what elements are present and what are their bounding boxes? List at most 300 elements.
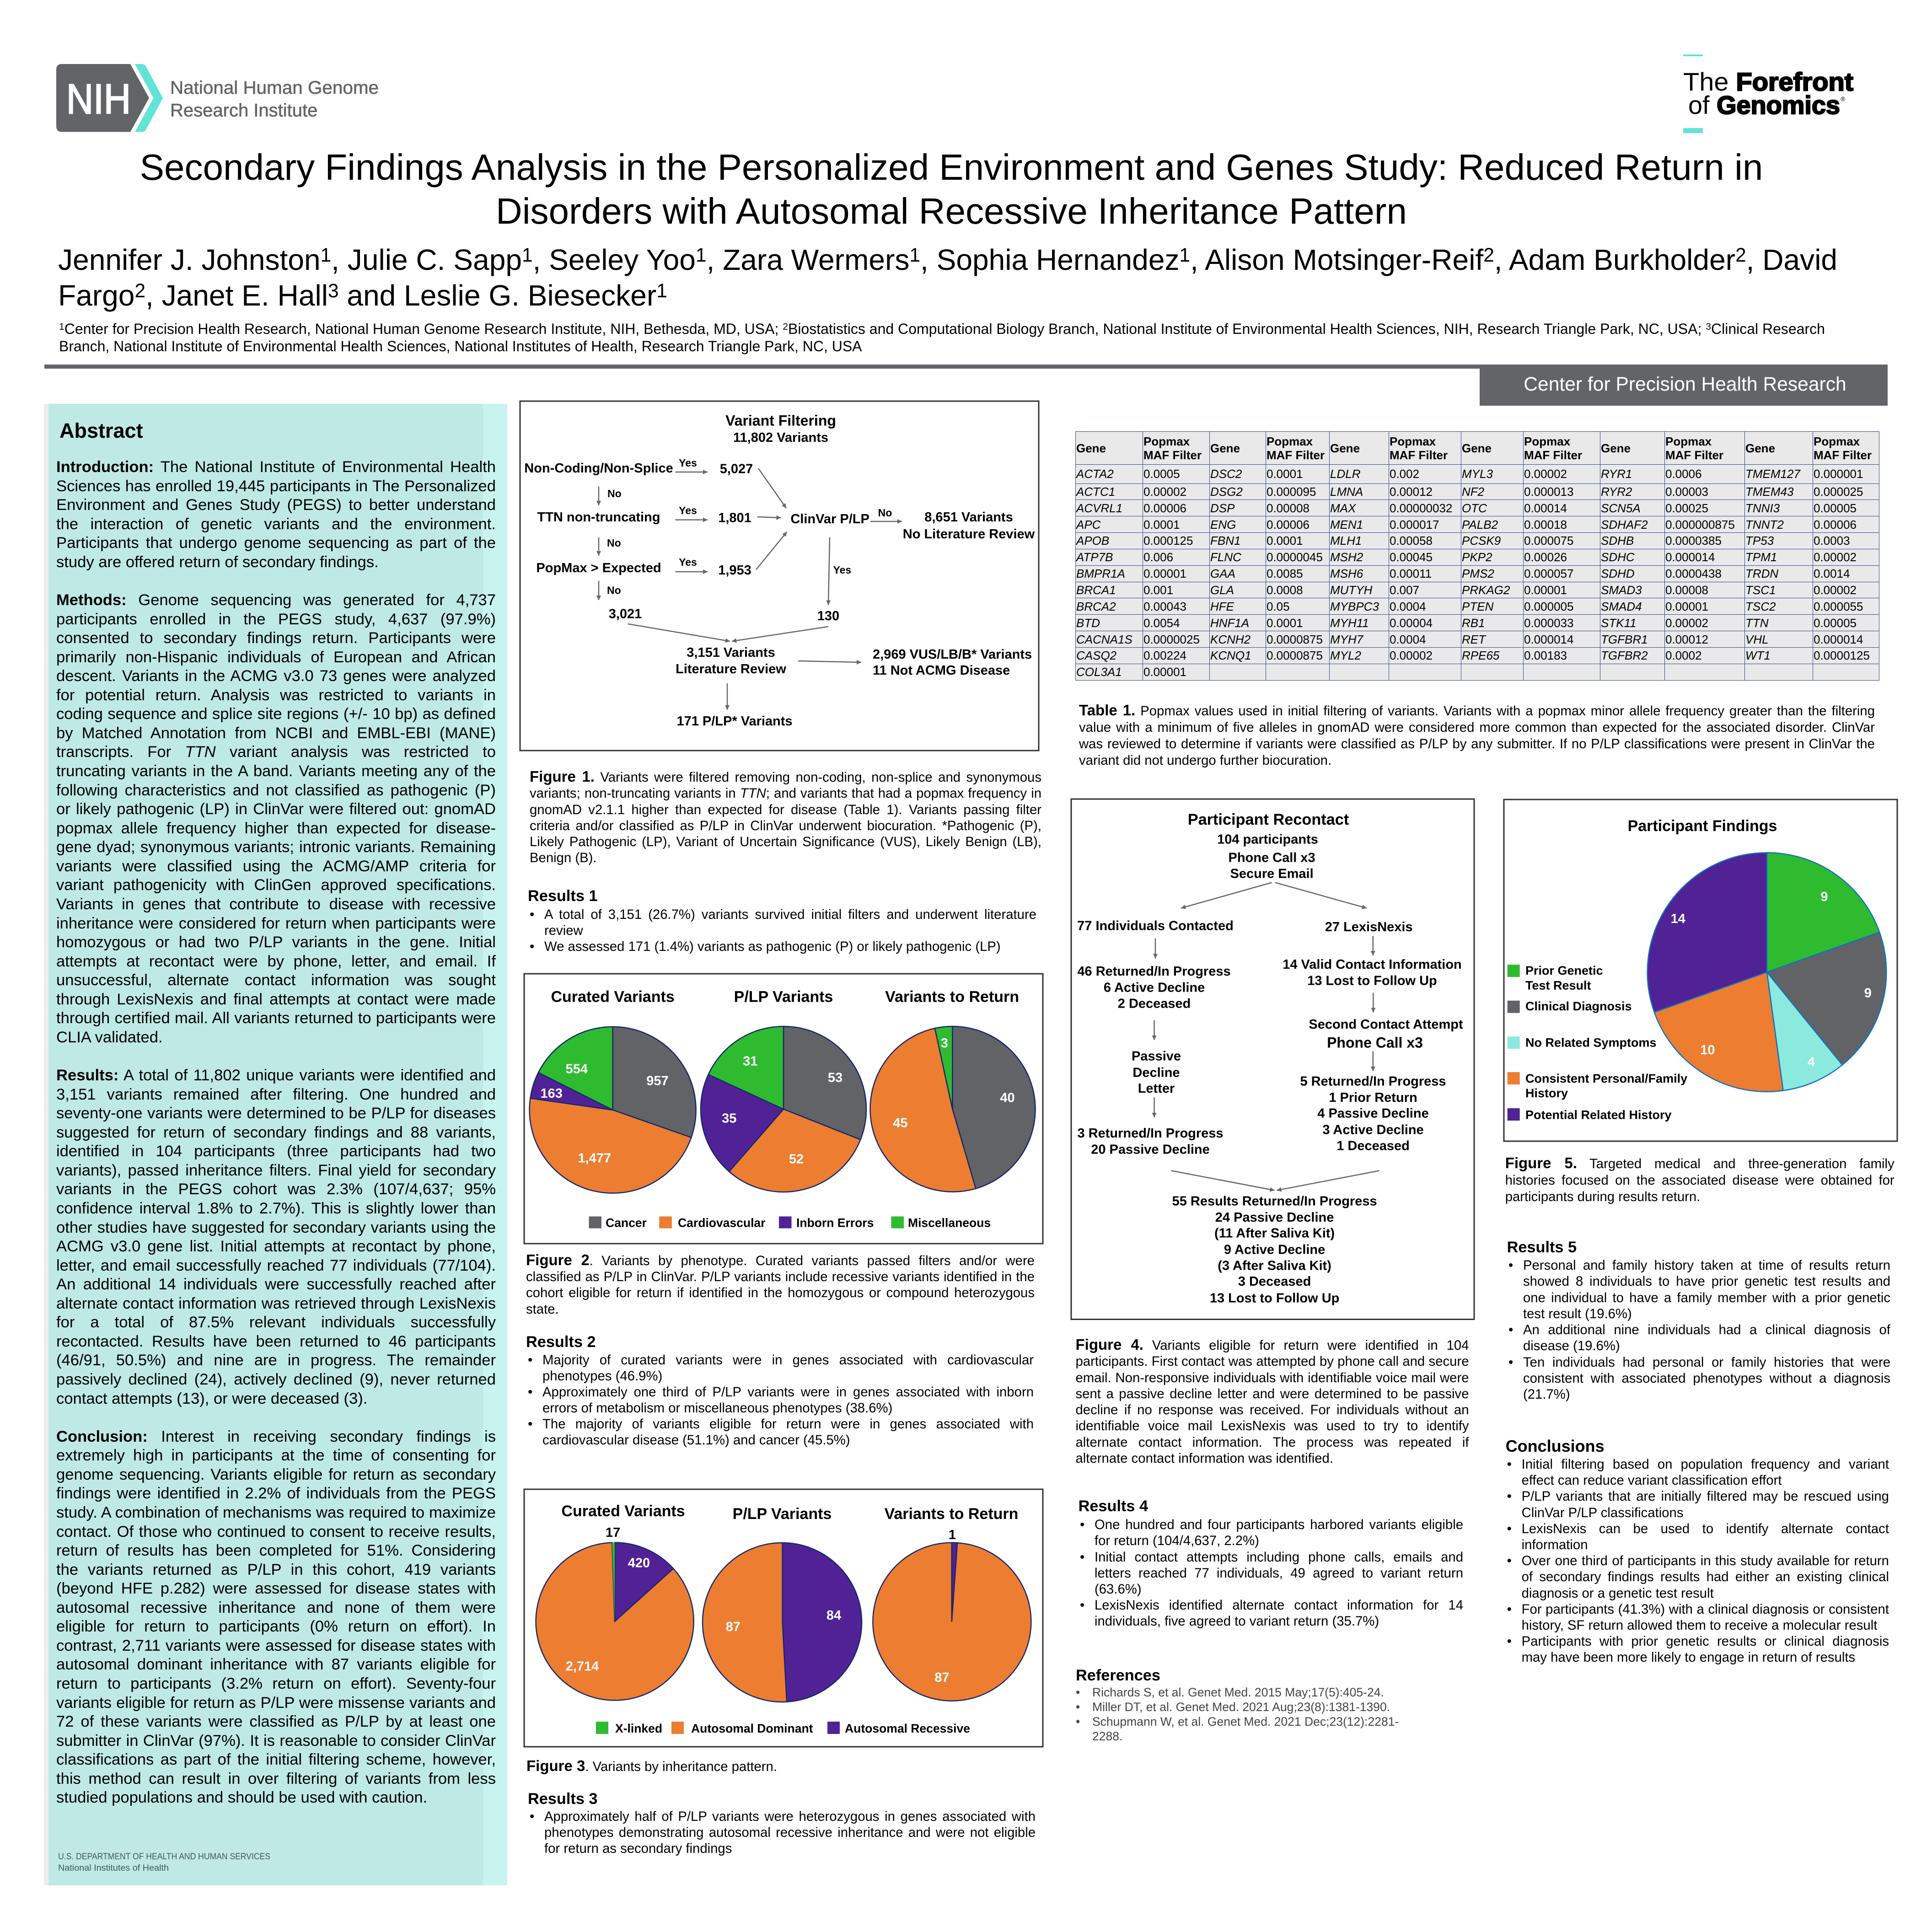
pie chart: P/LP variants by inheritance: 84 <box>826 1608 841 1623</box>
table 1: popmax MAF filter values: 0.00006 <box>1143 501 1186 515</box>
pie chart: curated variants: 957 <box>646 1073 669 1088</box>
table 1: popmax MAF filter values: LMNA <box>1330 485 1363 499</box>
results 5 bullets: (21.7%) <box>1523 1387 1570 1402</box>
table 1: popmax MAF filter values: 0.00001 <box>1665 600 1708 613</box>
abstract body text: Sciences has enrolled 19,445 participants in The Personalized <box>56 478 496 495</box>
table 1: popmax MAF filter values: 0.00001 <box>1524 583 1567 597</box>
table 1: popmax MAF filter values: 0.0000385 <box>1665 534 1722 547</box>
row: non-coding filter <box>524 457 786 508</box>
table 1: popmax MAF filter values: Gene <box>1330 441 1360 455</box>
legend: inheritance <box>596 1722 970 1735</box>
table 1: popmax MAF filter values: DSP <box>1210 501 1234 515</box>
table 1: popmax MAF filter values: MAF Filter <box>1814 448 1872 462</box>
header band: Center for Precision Health Research <box>44 365 1888 406</box>
table 1: popmax MAF filter values: Popmax <box>1665 435 1712 448</box>
table 1: popmax MAF filter values: 0.000125 <box>1143 534 1193 547</box>
affiliations: Branch, National Institute of Environmental Health Sciences, National Institutes of Health, Research Triangle Park, NC, USA <box>59 338 862 354</box>
abstract body text: truncating variants in the A band. Variants meeting any of the <box>56 762 496 780</box>
table 1: popmax MAF filter values: 0.00005 <box>1814 616 1857 630</box>
abstract body text: variants in the PEGS cohort was 2.3% (107/4,637; 95% <box>56 1181 496 1198</box>
abstract body text: following characteristics and not classified as pathogenic (P) <box>56 782 496 799</box>
figure 1 caption: gnomAD v2.1.1 higher than expected for disease (Table 1). Variants passing filter <box>530 802 1041 817</box>
footer: U.S. Department of Health and Human Services: U.S. DEPARTMENT OF HEALTH AND HUMAN SERVICES <box>58 1852 270 1862</box>
results 5 bullets: An additional nine individuals had a clinical diagnosis of <box>1523 1322 1890 1337</box>
outcome summary: 9 Active Decline <box>1224 1242 1325 1257</box>
left branch: individuals contacted: Letter <box>1138 1081 1175 1096</box>
conclusions bullets: For participants (41.3%) with a clinical diagnosis or consistent <box>1522 1602 1889 1617</box>
table 1 caption: variant did not undergo further biocuration. <box>1079 753 1331 768</box>
legend: participant findings: Test Result <box>1525 978 1591 992</box>
abstract body text: CLIA validated. <box>56 1029 163 1046</box>
abstract body text: through LexisNexis and final attempts at contact were made <box>56 991 496 1008</box>
right branch: LexisNexis: Phone Call x3 <box>1327 1034 1423 1051</box>
results 2 bullets: The majority of variants eligible for return were in genes associated with <box>542 1417 1034 1432</box>
heading: Participant Recontact: 104 participants <box>1217 832 1318 847</box>
figure 4 caption: Figure 4. Variants eligible for return were identified in 104 <box>1076 1336 1469 1353</box>
table 1: popmax MAF filter values: MYH11 <box>1330 616 1369 630</box>
row: popmax filter: 1,953 <box>718 563 751 578</box>
pie chart: participant findings: 4 <box>1808 1055 1815 1069</box>
abstract body text: Variants in genes that contribute to disease with recessive <box>56 896 496 913</box>
table 1: popmax MAF filter values: 0.000001 <box>1814 467 1863 481</box>
table 1: popmax MAF filter values: CASQ2 <box>1076 649 1116 662</box>
row: non-coding filter: 5,027 <box>720 462 753 477</box>
table 1: popmax MAF filter values: MYL3 <box>1462 467 1493 481</box>
row: popmax filter: Yes <box>679 556 697 568</box>
legend: phenotype: Cardiovascular <box>678 1216 765 1229</box>
table 1: popmax MAF filter values: KCNQ1 <box>1210 649 1251 662</box>
conclusions bullets: of secondary findings results had either an existing clinical <box>1522 1569 1889 1584</box>
table 1: popmax MAF filter values: 0.0001 <box>1267 616 1303 630</box>
heading: Variant Filtering: Variant Filtering <box>725 413 836 429</box>
title: Disorders with Autosomal Recessive Inheritance Pattern <box>496 191 1407 231</box>
table 1: popmax MAF filter values: 0.00043 <box>1143 600 1186 613</box>
table 1: popmax MAF filter values: 0.0054 <box>1143 616 1180 630</box>
pie chart: variants to return by inheritance <box>873 1528 1031 1701</box>
table 1: popmax MAF filter values: 0.000014 <box>1665 550 1715 564</box>
abstract body text: by Matched Annotation from NCBI and EMBL-EBI (MANE) <box>56 724 496 742</box>
chart titles: P/LP Variants <box>734 988 833 1005</box>
chart titles: Variants to Return <box>885 1505 1018 1523</box>
figure 1 caption <box>530 769 1041 866</box>
left branch: individuals contacted: 46 Returned/In Progress <box>1077 964 1231 979</box>
figure 2 caption: cohort eligible for return if identified in the homozygous or compound heterozygous <box>526 1285 1035 1300</box>
table 1: popmax MAF filter values: PRKAG2 <box>1462 583 1510 597</box>
node: 3,151 variants literature review: 3,151 Variants <box>687 645 775 660</box>
table 1 caption: was reviewed to determine if variants were classified as P/LP by any submitter. If no P/LP classifications were present in ClinVar the <box>1079 736 1875 751</box>
table 1: popmax MAF filter values: 0.000075 <box>1524 534 1573 547</box>
abstract body text: ACMG v3.0 gene list. Initial attempts at recontact by phone, <box>56 1238 496 1255</box>
table 1: popmax MAF filter values: 0.0008 <box>1267 583 1303 597</box>
table 1: popmax MAF filter values: DSG2 <box>1210 485 1243 499</box>
conclusions bullets: P/LP variants that are initially filtered may be rescued using <box>1522 1489 1889 1504</box>
figure 5 caption: participants during results return. <box>1505 1189 1700 1204</box>
pie chart: curated variants: 554 <box>566 1062 588 1076</box>
table 1: popmax MAF filter values: Popmax <box>1143 435 1190 448</box>
legend: inheritance: Autosomal Recessive <box>845 1722 970 1735</box>
results 5 bullets: Personal and family history taken at time of results return <box>1523 1258 1890 1273</box>
table 1: popmax MAF filter values: HNF1A <box>1210 616 1249 630</box>
results 2 bullets: cardiovascular disease (51.1%) and cancer (45.5%) <box>542 1433 850 1448</box>
left branch: individuals contacted: 20 Passive Decline <box>1091 1142 1210 1157</box>
abstract body text: seventy-one variants were determined to be P/LP for diseases <box>56 1105 496 1122</box>
abstract body text: autosomal recessive inheritance and none of them were <box>56 1599 496 1616</box>
results 3 bullets: Approximately half of P/LP variants were heterozygous in genes associated with <box>544 1809 1036 1824</box>
table 1: popmax MAF filter values: 0.00002 <box>1390 649 1433 662</box>
table 1: popmax MAF filter values: 0.0000125 <box>1814 649 1870 662</box>
title: Secondary Findings Analysis in the Personalized Environment and Genes Study: Reduced Return in <box>140 147 1763 188</box>
results 1 bullets <box>530 907 1036 955</box>
table 1: popmax MAF filter values: ACTC1 <box>1076 485 1115 499</box>
abstract body text: descent. Variants in the ACMG v3.0 73 genes were analyzed <box>56 667 496 685</box>
outcome summary: 55 Results Returned/In Progress <box>1172 1194 1377 1208</box>
table 1: popmax MAF filter values: 0.00183 <box>1524 649 1567 662</box>
outcome summary: 3 Deceased <box>1238 1274 1311 1289</box>
left branch: individuals contacted: Passive <box>1132 1049 1181 1063</box>
table 1: popmax MAF filter values: Popmax <box>1390 435 1436 448</box>
table 1: popmax MAF filter values: 0.00008 <box>1267 501 1309 515</box>
legend: phenotype <box>589 1216 991 1229</box>
table 1: popmax MAF filter values: APC <box>1076 518 1100 531</box>
pie chart: P/LP variants <box>701 1026 866 1192</box>
node: ClinVar P/LP: No <box>878 507 892 519</box>
table 1: popmax MAF filter values: GLA <box>1210 583 1234 597</box>
panel: figure 1 variant filtering flowchart <box>520 401 1039 751</box>
abstract body text: classifications as part of the initial filtering scheme, however, <box>56 1751 496 1768</box>
abstract body text: this method can result in over filtering of variants from less <box>56 1770 496 1787</box>
pie chart: variants to return by inheritance: 1 <box>949 1528 956 1542</box>
heading: Participant Recontact: Participant Recontact <box>1188 811 1349 828</box>
figure 3 caption: Figure 3. Variants by inheritance pattern. <box>526 1757 777 1774</box>
chart titles: Curated Variants <box>561 1503 685 1520</box>
table 1: popmax MAF filter values: RB1 <box>1462 616 1485 630</box>
pie chart: variants to return by inheritance: 87 <box>934 1670 950 1685</box>
node: 171 P/LP variants: 171 P/LP* Variants <box>676 714 793 729</box>
results 5 bullets <box>1508 1257 1890 1403</box>
table 1: popmax MAF filter values: TRDN <box>1745 567 1778 580</box>
results 1 bullets: review <box>544 923 583 938</box>
chart titles <box>561 1503 1018 1523</box>
results 4 bullets: letters reached 77 individuals, 49 agreed to variant return <box>1095 1566 1463 1581</box>
row: TTN filter: TTN non-truncating <box>537 510 660 525</box>
table 1: popmax MAF filter values: 0.0000438 <box>1665 567 1722 580</box>
table 1: popmax MAF filter values: MAF Filter <box>1665 448 1723 462</box>
authors <box>58 242 1865 313</box>
table 1: popmax MAF filter values: APOB <box>1076 534 1109 547</box>
abstract body text: recontacted. Results have been returned to 46 participants <box>56 1333 496 1350</box>
panel: figure 5 participant findings <box>1504 800 1897 1141</box>
results 4 bullets: LexisNexis identified alternate contact information for 14 <box>1095 1598 1463 1613</box>
heading: Conclusions: Conclusions <box>1506 1437 1605 1455</box>
table 1: popmax MAF filter values: 0.00000032 <box>1390 501 1452 515</box>
figure 2 caption <box>526 1253 1035 1317</box>
arrow: no to popmax: No <box>607 537 621 549</box>
heading: Results 4: Results 4 <box>1079 1497 1148 1515</box>
table 1: popmax MAF filter values: 0.0005 <box>1143 467 1180 481</box>
left branch: individuals contacted: 77 Individuals Contacted <box>1077 918 1234 933</box>
right branch: LexisNexis: Second Contact Attempt <box>1309 1017 1463 1032</box>
right branch: LexisNexis: 3 Active Decline <box>1322 1122 1424 1137</box>
figure 4 caption: alternate contact information. The process was repeated if <box>1076 1435 1469 1450</box>
legend: participant findings: Clinical Diagnosis <box>1525 999 1632 1013</box>
pie chart: variants to return: 45 <box>893 1116 908 1130</box>
table 1: popmax MAF filter values: COL3A1 <box>1076 665 1122 679</box>
legend: participant findings: History <box>1525 1086 1568 1100</box>
results 5 bullets: disease (19.6%) <box>1523 1338 1620 1353</box>
abstract body text: letter, and email successfully reached 77 individuals (77/104). <box>56 1257 496 1274</box>
abstract body text: (46/91, 50.5%) and nine are in progress. The remainder <box>56 1352 496 1369</box>
table 1: popmax MAF filter values: Popmax <box>1524 435 1570 448</box>
logo: The Forefront of Genomics: of Genomics <box>1688 91 1840 119</box>
table 1: popmax MAF filter values: PCSK9 <box>1462 534 1501 547</box>
row: TTN filter <box>537 504 781 525</box>
table 1: popmax MAF filter values <box>1075 431 1879 681</box>
outcome summary: 24 Passive Decline <box>1215 1210 1334 1225</box>
arrow: no to 3,021: 3,021 <box>609 607 642 622</box>
table 1: popmax MAF filter values: Gene <box>1601 441 1631 455</box>
chart titles: P/LP Variants <box>733 1505 832 1523</box>
results 4 bullets <box>1080 1517 1463 1629</box>
table 1: popmax MAF filter values: MUTYH <box>1330 583 1372 597</box>
table 1: popmax MAF filter values: 0.00058 <box>1390 534 1433 547</box>
figure 4 caption: participants. First contact was attempted by phone call and secure <box>1076 1354 1469 1369</box>
abstract body text: variants were classified using the ACMG/AMP criteria for <box>56 858 496 875</box>
table 1: popmax MAF filter values: 0.00026 <box>1524 550 1567 564</box>
figure 4 caption: decline if no response was received. For individuals without an <box>1076 1402 1469 1417</box>
table 1: popmax MAF filter values: Gene <box>1076 441 1106 455</box>
table 1: popmax MAF filter values: 0.0000875 <box>1267 633 1323 646</box>
legend: participant findings <box>1508 964 1687 1122</box>
row: non-coding filter: Yes <box>679 457 697 469</box>
table 1: popmax MAF filter values: MSH6 <box>1330 567 1363 580</box>
right branch: LexisNexis: 4 Passive Decline <box>1317 1106 1429 1121</box>
table 1: popmax MAF filter values: FLNC <box>1210 550 1241 564</box>
panel: figure 3 variants by inheritance <box>524 1489 1043 1747</box>
results 4 bullets: Initial contact attempts including phone calls, emails and <box>1095 1550 1463 1565</box>
abstract body text: Results: A total of 11,802 unique variants were identified and <box>56 1067 496 1084</box>
table 1: popmax MAF filter values: MYH7 <box>1330 633 1363 646</box>
table 1: popmax MAF filter values: 0.000017 <box>1390 518 1439 531</box>
table 1: popmax MAF filter values: HFE <box>1210 600 1234 613</box>
figure 5 caption: Figure 5. Targeted medical and three-generation family <box>1505 1154 1894 1171</box>
results 4 bullets: One hundred and four participants harbored variants eligible <box>1095 1517 1463 1532</box>
table 1: popmax MAF filter values: SMAD4 <box>1601 600 1642 613</box>
chart titles <box>551 988 1019 1005</box>
abstract body text: variant pathogenicity with ClinGen approved specifications. <box>56 876 496 894</box>
abstract body text: passively declined (24), actively declined (9), never returned <box>56 1371 496 1388</box>
abstract body text: inheritance were considered for return when participants were <box>56 915 496 932</box>
table 1: popmax MAF filter values: 0.0014 <box>1814 567 1850 580</box>
table 1: popmax MAF filter values: TSC1 <box>1745 583 1776 597</box>
table 1: popmax MAF filter values: PKP2 <box>1462 550 1492 564</box>
table 1: popmax MAF filter values: Gene <box>1745 441 1775 455</box>
figure 2 caption: classified as P/LP in ClinVar. P/LP variants include recessive variants identified in the <box>526 1269 1035 1284</box>
authors: Jennifer J. Johnston1, Julie C. Sapp1, Seeley Yoo1, Zara Wermers1, Sophia Hernandez1, Alison Motsinger-Reif2, Adam Burkholder2, David <box>58 243 1837 276</box>
abstract body text: 72 of these variants were classified as P/LP by at least one <box>56 1713 496 1730</box>
table 1: popmax MAF filter values: 0.0006 <box>1665 467 1702 481</box>
abstract body text: Introduction: The National Institute of Environmental Health <box>56 458 496 476</box>
figure 1 caption: Benign (B). <box>530 850 597 865</box>
table 1: popmax MAF filter values: MLH1 <box>1330 534 1362 547</box>
table 1: popmax MAF filter values: 0.000055 <box>1814 600 1863 613</box>
table 1: popmax MAF filter values: MYL2 <box>1330 649 1361 662</box>
table 1: popmax MAF filter values: PTEN <box>1462 600 1493 613</box>
table 1: popmax MAF filter values: RYR1 <box>1601 467 1632 481</box>
conclusions bullets: Over one third of participants in this study available for return <box>1522 1553 1889 1568</box>
table 1: popmax MAF filter values: 0.00004 <box>1390 616 1433 630</box>
table 1: popmax MAF filter values: 0.00003 <box>1665 485 1708 499</box>
table 1: popmax MAF filter values: MAX <box>1330 501 1356 515</box>
table 1: popmax MAF filter values: VHL <box>1745 633 1769 646</box>
footer: U.S. Department of Health and Human Services: National Institutes of Health <box>58 1863 169 1873</box>
abstract body text: Conclusion: Interest in receiving secondary findings is <box>56 1428 496 1445</box>
pie chart: participant findings <box>1648 853 1886 1092</box>
table 1: popmax MAF filter values: Gene <box>1462 441 1492 455</box>
node: ClinVar P/LP: ClinVar P/LP <box>790 512 869 526</box>
abstract body text: other studies have suggested for secondary variants using the <box>56 1218 496 1236</box>
table 1: popmax MAF filter values: 0.000013 <box>1524 485 1573 499</box>
right branch: LexisNexis: 13 Lost to Follow Up <box>1307 973 1437 988</box>
conclusions bullets: Participants with prior genetic results or clinical diagnosis <box>1522 1634 1889 1649</box>
legend: phenotype: Miscellaneous <box>908 1216 991 1229</box>
node: 3,151 variants literature review: Literature Review <box>676 662 786 676</box>
arrow: no to TTN: No <box>607 488 622 499</box>
table 1: popmax MAF filter values: 0.0000045 <box>1267 550 1323 564</box>
results 2 bullets: Majority of curated variants were in genes associated with cardiovascular <box>542 1352 1034 1368</box>
figure 2 caption: state. <box>526 1302 559 1317</box>
table 1: popmax MAF filter values: DSC2 <box>1210 467 1242 481</box>
right branch: LexisNexis: 14 Valid Contact Information <box>1283 957 1462 972</box>
logo: The Forefront of Genomics <box>1683 54 1853 133</box>
abstract body text: for potential return. Analysis was restricted to variants in <box>56 687 496 704</box>
abstract body text: contact. Of those who continued to consent to receive results, <box>56 1523 496 1540</box>
left branch: individuals contacted <box>1077 918 1234 1157</box>
conclusions bullets <box>1507 1456 1889 1666</box>
table 1: popmax MAF filter values: 0.002 <box>1390 467 1419 481</box>
logo: NIH National Human Genome Research Institute: Research Institute <box>170 101 317 121</box>
table 1: popmax MAF filter values: Popmax <box>1814 435 1860 448</box>
abstract body text: 3,151 variants remained after filtering. One hundred and <box>56 1086 496 1103</box>
table 1: popmax MAF filter values: 0.00014 <box>1524 501 1567 515</box>
table 1: popmax MAF filter values: PALB2 <box>1462 518 1498 531</box>
abstract body text: through certified mail. All variants returned to participants were <box>56 1009 496 1027</box>
table 1: popmax MAF filter values: KCNH2 <box>1210 633 1250 646</box>
abstract body text: contrast, 2,711 variants were assessed for disease states with <box>56 1637 496 1654</box>
legend: inheritance: Autosomal Dominant <box>691 1722 813 1735</box>
abstract body text: alternate contact information was retrieved through LexisNexis <box>56 1295 496 1312</box>
node: ClinVar P/LP <box>790 507 902 526</box>
table 1: popmax MAF filter values: RET <box>1462 633 1486 646</box>
table 1: popmax MAF filter values: 0.0085 <box>1267 567 1303 580</box>
row: non-coding filter: Non-Coding/Non-Splice <box>524 461 673 476</box>
table 1: popmax MAF filter values: OTC <box>1462 501 1487 515</box>
node: VUS variants: 11 Not ACMG Disease <box>873 663 1010 678</box>
results 3 bullets: phenotypes demonstrating autosomal recessive inheritance and were not eligible <box>544 1825 1036 1840</box>
table 1: popmax MAF filter values: RPE65 <box>1462 649 1499 662</box>
pie chart: participant findings: 14 <box>1671 912 1685 926</box>
table 1: popmax MAF filter values: 0.00025 <box>1665 501 1708 515</box>
outcome summary <box>1172 1194 1377 1305</box>
table 1: popmax MAF filter values: 0.05 <box>1267 600 1290 613</box>
table 1: popmax MAF filter values: 0.0001 <box>1267 467 1303 481</box>
table 1: popmax MAF filter values: 0.0000875 <box>1267 649 1323 662</box>
node: VUS variants: 2,969 VUS/LB/B* Variants <box>873 647 1032 662</box>
results 4 bullets: (63.6%) <box>1095 1582 1142 1597</box>
abstract body text: findings were identified in 2.2% of individuals from the PEGS <box>56 1485 496 1502</box>
right branch: LexisNexis <box>1283 919 1463 1153</box>
table 1: popmax MAF filter values: 0.00045 <box>1390 550 1433 564</box>
table 1: popmax MAF filter values: SDHAF2 <box>1601 518 1648 531</box>
table 1: popmax MAF filter values: FBN1 <box>1210 534 1240 547</box>
left branch: individuals contacted: 3 Returned/In Progress <box>1077 1126 1224 1141</box>
pie chart: P/LP variants by inheritance: 87 <box>726 1620 741 1634</box>
table 1: popmax MAF filter values: 0.00002 <box>1665 616 1708 630</box>
right branch: LexisNexis: 5 Returned/In Progress <box>1300 1074 1446 1089</box>
conclusions bullets: information <box>1522 1537 1588 1552</box>
table 1: popmax MAF filter values: 0.0001 <box>1143 518 1180 531</box>
abstract body text: the interaction of genetic variants and the environment. <box>56 515 496 533</box>
table 1: popmax MAF filter values: Gene <box>1210 441 1240 455</box>
pie chart: participant findings: 9 <box>1820 890 1828 904</box>
outcome summary: (11 After Saliva Kit) <box>1214 1226 1335 1240</box>
abstract body text: submitter in ClinVar (97%). It is reasonable to consider ClinVar <box>56 1732 496 1750</box>
results 5 bullets: Ten individuals had personal or family histories that were <box>1523 1355 1890 1370</box>
abstract body text: attempts at recontact were by phone, letter, and email. If <box>56 953 496 970</box>
results 5 bullets: one individual to have a family member with a prior genetic <box>1523 1290 1890 1305</box>
references list: Miller DT, et al. Genet Med. 2021 Aug;23(8):1381-1390. <box>1092 1700 1390 1714</box>
abstract body text: studied populations and should be used with caution. <box>56 1789 427 1806</box>
references list <box>1076 1685 1442 1744</box>
right branch: LexisNexis: 1 Deceased <box>1336 1138 1410 1153</box>
references list: Schupmann W, et al. Genet Med. 2021 Dec;23(12):2281- <box>1092 1715 1399 1728</box>
conclusions bullets: ClinVar P/LP classifications <box>1522 1505 1683 1520</box>
heading: Results 2: Results 2 <box>526 1333 596 1351</box>
table 1: popmax MAF filter values: TNNT2 <box>1745 518 1784 531</box>
row: popmax filter: PopMax > Expected <box>536 561 661 575</box>
left branch: individuals contacted: Decline <box>1132 1065 1180 1080</box>
abstract body text: extremely high in participants at the time of consenting for <box>56 1447 496 1464</box>
table 1: popmax MAF filter values: MYBPC3 <box>1330 600 1379 613</box>
heading: Variant Filtering: 11,802 Variants <box>733 430 828 445</box>
row: TTN filter: Yes <box>679 504 697 516</box>
arrow: yes to 130: Yes <box>833 564 851 576</box>
figure 4 caption: sent a passive decline letter and were determined to be passive <box>1076 1386 1469 1401</box>
arrow: no to TTN <box>599 487 622 505</box>
heading: Results 5: Results 5 <box>1507 1239 1577 1256</box>
results 2 bullets: Approximately one third of P/LP variants were in genes associated with inborn <box>542 1385 1034 1400</box>
heading: Participant Recontact: Secure Email <box>1230 866 1314 881</box>
table 1: popmax MAF filter values: PMS2 <box>1462 567 1494 580</box>
conclusions bullets: LexisNexis can be used to identify alternate contact <box>1522 1521 1889 1536</box>
table 1: popmax MAF filter values: 0.00002 <box>1143 485 1186 499</box>
abstract body text: identified in 104 participants (three participants had two <box>56 1143 496 1160</box>
abstract body text: unsuccessful, alternate contact information was sought <box>56 971 496 989</box>
table 1 caption <box>1079 703 1875 769</box>
table 1: popmax MAF filter values: SMAD3 <box>1601 583 1642 597</box>
figure 2 caption: Figure 2. Variants by phenotype. Curated variants passed filters and/or were <box>526 1251 1035 1268</box>
heading: Abstract: Abstract <box>59 419 143 442</box>
chart titles: Curated Variants <box>551 988 675 1005</box>
outcome summary: 13 Lost to Follow Up <box>1210 1291 1339 1305</box>
pie chart: P/LP variants: 35 <box>722 1111 736 1126</box>
figure 4 caption: email. Non-responsive individuals with identifiable voice mail were <box>1076 1370 1469 1385</box>
table 1: popmax MAF filter values: 0.000025 <box>1814 485 1863 499</box>
logo: NIH National Human Genome Research Institute: National Human Genome <box>170 78 379 98</box>
table 1: popmax MAF filter values: 0.0004 <box>1390 633 1426 646</box>
title <box>82 145 1820 233</box>
abstract body text: or likely pathogenic (LP) in ClinVar were filtered out: gnomAD <box>56 800 496 818</box>
table 1: popmax MAF filter values: ENG <box>1210 518 1236 531</box>
